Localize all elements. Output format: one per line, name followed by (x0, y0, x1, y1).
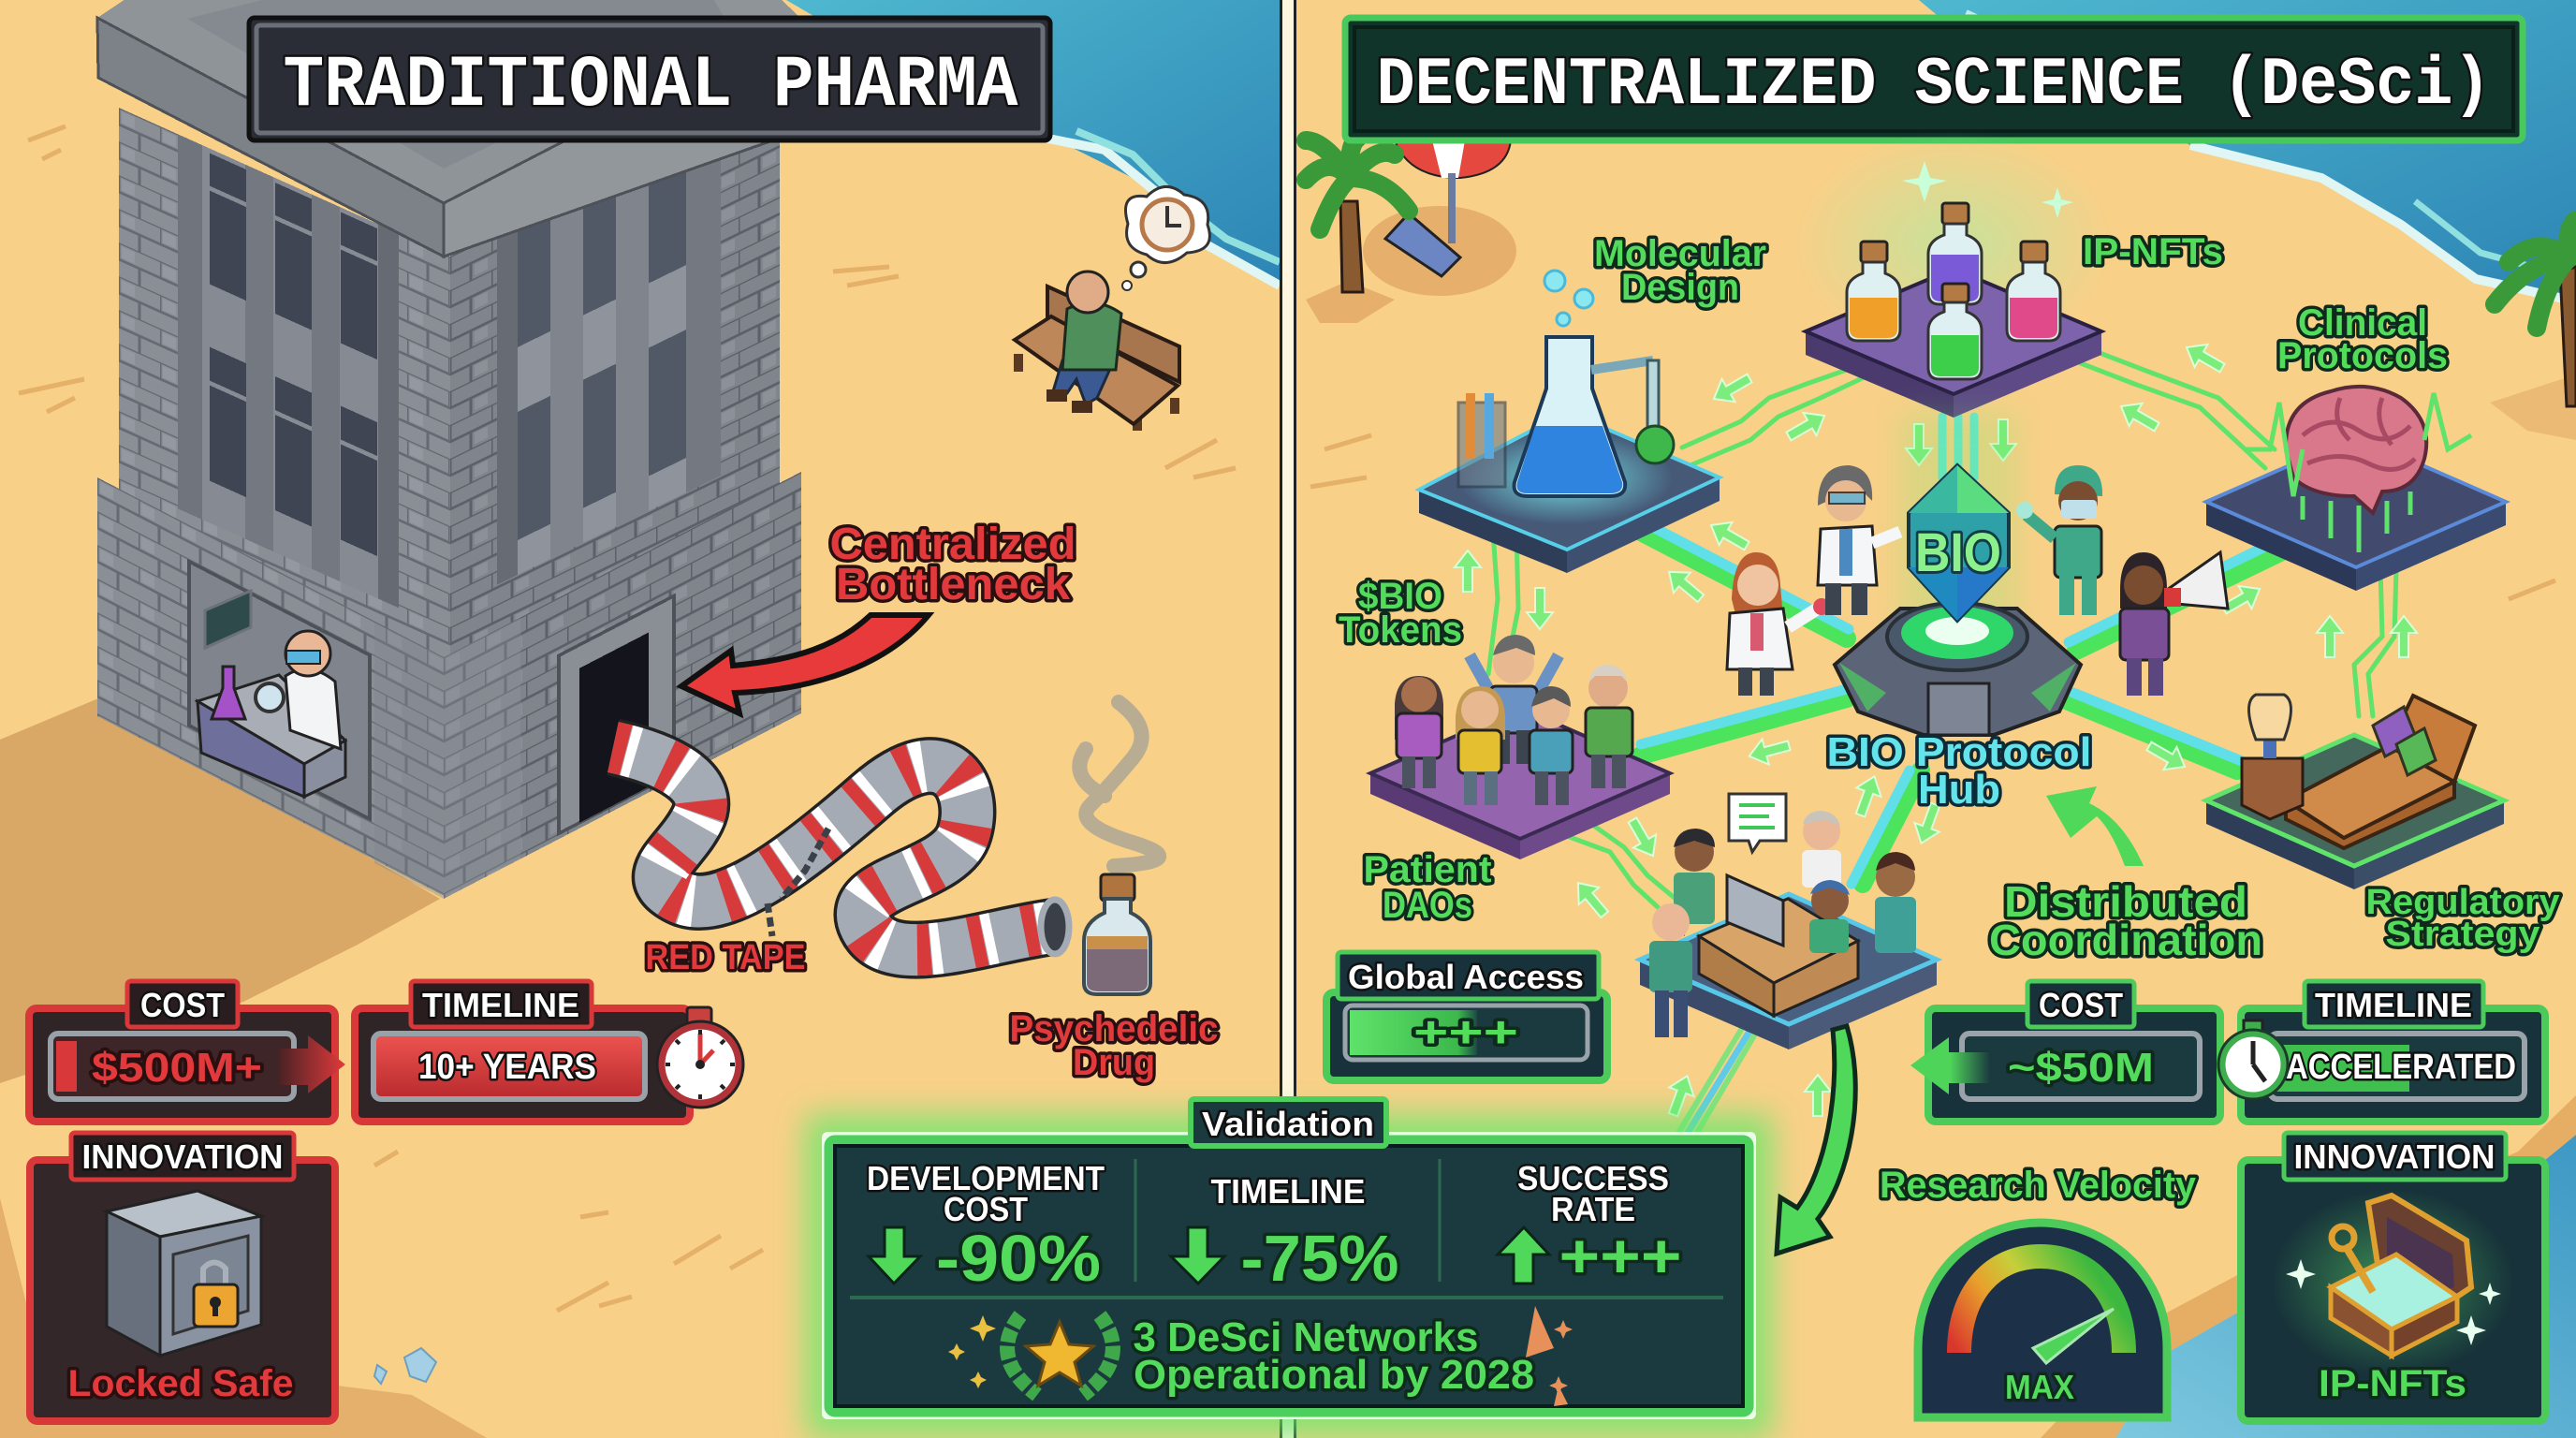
team member front (1649, 903, 1692, 1037)
palm trunk (2560, 267, 2576, 406)
label: distributed coordination: Coordination (1989, 916, 2262, 964)
metric: success rate: RATE (1551, 1190, 1635, 1228)
label: clinical protocols (2277, 302, 2448, 376)
cost tab: COST (2039, 986, 2123, 1024)
scientist body (285, 669, 341, 749)
locked safe icon (107, 1191, 261, 1356)
hub beam glow (1900, 412, 2017, 637)
validation tab (1191, 1099, 1386, 1146)
cost arrow (1910, 1037, 1990, 1094)
BIO hub (1835, 412, 2081, 735)
title: decentralized science: DECENTRALIZED SCIENCE (DeSci) (1376, 47, 2492, 124)
building base centre shading (374, 618, 521, 899)
man head (1067, 271, 1108, 313)
BIO gem (1909, 465, 2009, 621)
panel: validation (805, 1099, 1773, 1438)
purple flask (212, 667, 245, 719)
metric: success rate: SUCCESS (1517, 1159, 1669, 1197)
cost gauge (1962, 1034, 2200, 1099)
metric: timeline: -75% (1241, 1222, 1398, 1295)
metric: success rate: +++ (1559, 1221, 1681, 1290)
global access gauge: +++ (1413, 1007, 1518, 1056)
flow arrows (1455, 336, 2417, 1119)
label: regulatory strategy: Regulatory (2366, 883, 2559, 922)
confetti right (1526, 1306, 1573, 1406)
laurel wreath and star (1007, 1315, 1113, 1395)
label: patient DAOs (1363, 849, 1492, 926)
global access tab: Global Access (1348, 958, 1584, 996)
golden key (2345, 1245, 2373, 1292)
platform: patient DAOs community (1370, 635, 1670, 859)
person: girl yellow (1456, 686, 1505, 805)
platform block (1640, 894, 1937, 1049)
scattered pebbles (374, 1348, 436, 1384)
label: centralized bottleneck (829, 520, 1076, 609)
confetti left (948, 1315, 996, 1388)
timeline gauge (2270, 1034, 2525, 1099)
metric: timeline (1171, 1172, 1398, 1295)
label: molecular design: Molecular (1594, 233, 1766, 274)
building inner roof (187, 0, 730, 169)
innovation tab: INNOVATION (2293, 1137, 2496, 1176)
label: clinical protocols: Clinical (2298, 302, 2427, 344)
link: team to validation (1676, 1026, 1760, 1137)
magnifier (256, 683, 284, 712)
label: BIO tokens: $BIO (1358, 576, 1442, 617)
timeline tab: TIMELINE (2315, 986, 2472, 1024)
platform: clinical protocols brain (2206, 387, 2506, 591)
label: BIO tokens: Tokens (1339, 609, 1462, 651)
vial green (1928, 284, 1982, 379)
sparkles (2286, 1259, 2501, 1345)
megaphone (2167, 552, 2228, 609)
chest glow (2271, 1189, 2514, 1376)
label: research velocity: Research Velocity (1880, 1165, 2197, 1206)
label: clinical protocols: Protocols (2277, 335, 2448, 376)
centre divider (1280, 0, 1296, 1438)
lab scientist at desk (198, 591, 345, 797)
platform: molecular design flask (1419, 271, 1720, 573)
cost value: $500M+ (92, 1045, 262, 1091)
label: distributed coordination: Distributed (2004, 877, 2247, 926)
metric: development cost (867, 1159, 1105, 1295)
metric: development cost: DEVELOPMENT (867, 1159, 1105, 1197)
platform: regulatory strategy chaise (2206, 695, 2504, 889)
platform block (1370, 708, 1670, 859)
global access gauge (1345, 1005, 1588, 1060)
person: woman with megaphone (2120, 552, 2228, 696)
platform block (1419, 412, 1720, 573)
timeline tab: TIMELINE (422, 986, 579, 1024)
side apparatus (1591, 360, 1674, 463)
pipe outlet (1041, 900, 1069, 954)
validation frame (822, 1132, 1756, 1419)
lamp and side table (2242, 695, 2303, 819)
bench legs (1018, 354, 1175, 431)
platform block (1806, 269, 2101, 418)
palm tree and umbrella left (1306, 139, 1516, 323)
title: decentralized science (1345, 18, 2523, 140)
label: patient DAOs: Patient (1363, 849, 1492, 890)
label: BIO tokens (1339, 576, 1462, 651)
sand shading: bottom left dune (0, 1198, 487, 1438)
stopwatch icon (2218, 1020, 2288, 1099)
label: patient DAOs: DAOs (1383, 885, 1472, 926)
palm shadow (1306, 281, 1395, 323)
innovation tab: INNOVATION (82, 1137, 283, 1176)
gauge value: MAX (2005, 1368, 2074, 1406)
illustration: traditional pharma building (97, 0, 801, 899)
cost gauge (51, 1034, 294, 1099)
arrow: distributed coordination to hub (2046, 786, 2144, 866)
label: IP-NFTs: IP-NFTs (2083, 231, 2223, 272)
man legs (1053, 360, 1114, 404)
panel: DeSci cost (1910, 981, 2220, 1122)
label: psychedelic drug: Drug (1073, 1042, 1155, 1083)
panel: global access (1326, 952, 1607, 1080)
person: old man green (1586, 665, 1632, 788)
platform block (2206, 735, 2504, 889)
panel: DeSci timeline (2218, 981, 2545, 1122)
label: regulatory strategy (2366, 883, 2559, 954)
wall chart (205, 591, 251, 648)
timeline value: 10+ YEARS (418, 1048, 596, 1087)
person: surgeon (2016, 465, 2102, 615)
monitor (1727, 875, 1783, 946)
ocean: bottom right water (2041, 1095, 2576, 1438)
label: red tape: RED TAPE (646, 938, 805, 977)
gauge housing (1918, 1223, 2167, 1417)
red arrow to door (681, 615, 929, 713)
ocean: left panel water (786, 0, 1280, 286)
timeline gauge (373, 1034, 645, 1099)
test tubes (1458, 393, 1505, 487)
bench back (1047, 286, 1179, 382)
vial orange (1847, 242, 1900, 341)
locked safe label: Locked Safe (67, 1363, 294, 1404)
psychedelic drug bottle (1084, 874, 1150, 994)
panel: traditional innovation (30, 1133, 335, 1421)
vial pink (2007, 242, 2060, 341)
scientist head (285, 631, 330, 676)
palm shadow (2490, 374, 2576, 440)
building crown left (97, 18, 444, 257)
label: regulatory strategy: Strategy (2385, 915, 2540, 954)
team member left (1674, 829, 1715, 924)
validation tab: Validation (1202, 1105, 1374, 1143)
connection beams network (1488, 346, 2396, 1137)
palm fronds (1306, 139, 1409, 229)
label: BIO protocol hub: BIO Protocol (1827, 729, 2091, 775)
sand shading: building shadow (0, 698, 440, 1083)
building upper right face (450, 77, 780, 678)
smoke (1079, 702, 1159, 866)
person: boy teal (1530, 686, 1573, 805)
platform: research team desk (1640, 794, 1937, 1049)
padlock (203, 1262, 226, 1287)
platform block (2206, 436, 2506, 591)
panel: traditional timeline (355, 981, 743, 1122)
milestone text (1133, 1314, 1534, 1398)
building upper left face (119, 108, 450, 668)
label: molecular design (1594, 233, 1766, 308)
cost value: ~$50M (2008, 1045, 2154, 1091)
glow over vials (1794, 131, 2113, 356)
bottleneck pipe wrapped in red tape (613, 747, 1053, 950)
vial purple (1928, 203, 1982, 304)
milestone text: 3 DeSci Networks (1133, 1314, 1479, 1360)
flask (1515, 337, 1625, 496)
team member blue hair (1809, 880, 1850, 953)
beach chair (1385, 213, 1460, 276)
platform: IP-NFT vials (1794, 131, 2113, 418)
person: woman purple (1395, 676, 1443, 788)
bench seat (1015, 316, 1178, 424)
palm fronds (2495, 220, 2576, 328)
label: BIO protocol hub (1827, 729, 2091, 813)
label: centralized bottleneck: Centralized (829, 520, 1076, 569)
label: psychedelic drug (1009, 1008, 1219, 1083)
label: BIO protocol hub: Hub (1918, 767, 2000, 813)
validation glow (805, 1114, 1773, 1438)
BIO gem: BIO (1915, 522, 2001, 583)
title: traditional pharma: TRADITIONAL PHARMA (283, 45, 1018, 127)
stopwatch icon (657, 1007, 743, 1108)
panel: DeSci innovation (2241, 1133, 2545, 1421)
desk (1699, 899, 1858, 1016)
building roof (97, 0, 801, 203)
sparkles (1902, 161, 2073, 218)
metric: development cost: COST (944, 1190, 1028, 1228)
pipe chain (768, 829, 828, 936)
metric: timeline: TIMELINE (1211, 1172, 1365, 1211)
man body (1062, 303, 1121, 370)
IP-NFTs label: IP-NFTs (2319, 1363, 2466, 1404)
treasure chest icon (2331, 1196, 2471, 1356)
beams: hub spokes (1641, 417, 2286, 884)
cushions (2373, 707, 2417, 756)
person: male scientist (1818, 465, 1900, 615)
building base left face (97, 477, 444, 896)
metric: success rate (1498, 1159, 1681, 1290)
palm tree right (2490, 220, 2576, 440)
thought bubble with clock (1122, 186, 1209, 290)
label: distributed coordination (1989, 877, 2262, 964)
milestone text: Operational by 2028 (1134, 1352, 1534, 1398)
label: molecular design: Design (1621, 267, 1739, 308)
brain (2286, 387, 2426, 513)
title: traditional pharma (249, 18, 1050, 140)
person: female scientist (1727, 552, 1830, 696)
timeline value: ACCELERATED (2286, 1048, 2516, 1087)
hub base (1835, 603, 2081, 735)
cost tab: COST (140, 986, 225, 1024)
links: between platforms (1488, 346, 2396, 907)
palm trunk (1340, 201, 1363, 292)
desk (198, 675, 345, 764)
team member right (1875, 852, 1916, 953)
bubbles (1544, 271, 1593, 326)
cost arrow (279, 1035, 345, 1093)
ocean: right panel water (1919, 0, 2576, 301)
gauge colour arc (1959, 1256, 2124, 1353)
team member old man (1802, 811, 1841, 888)
panel: traditional cost (29, 981, 345, 1122)
old man waiting on bench (1015, 271, 1179, 431)
speech bubble (1729, 794, 1786, 852)
label: psychedelic drug: Psychedelic (1009, 1008, 1219, 1049)
label: centralized bottleneck: Bottleneck (836, 560, 1070, 609)
building crown right (444, 19, 801, 257)
gauge needle (2033, 1309, 2114, 1363)
panel: research velocity (1880, 1165, 2197, 1417)
building base right face (444, 472, 801, 899)
circuit traces (2303, 492, 2410, 552)
chaise lounge (2286, 696, 2475, 848)
ECG line (2247, 393, 2471, 496)
umbrella canopy (1395, 140, 1511, 178)
person: man arms raised (1470, 635, 1559, 764)
metric: development cost: -90% (936, 1222, 1101, 1295)
arrow: team to validation (1777, 1026, 1855, 1254)
